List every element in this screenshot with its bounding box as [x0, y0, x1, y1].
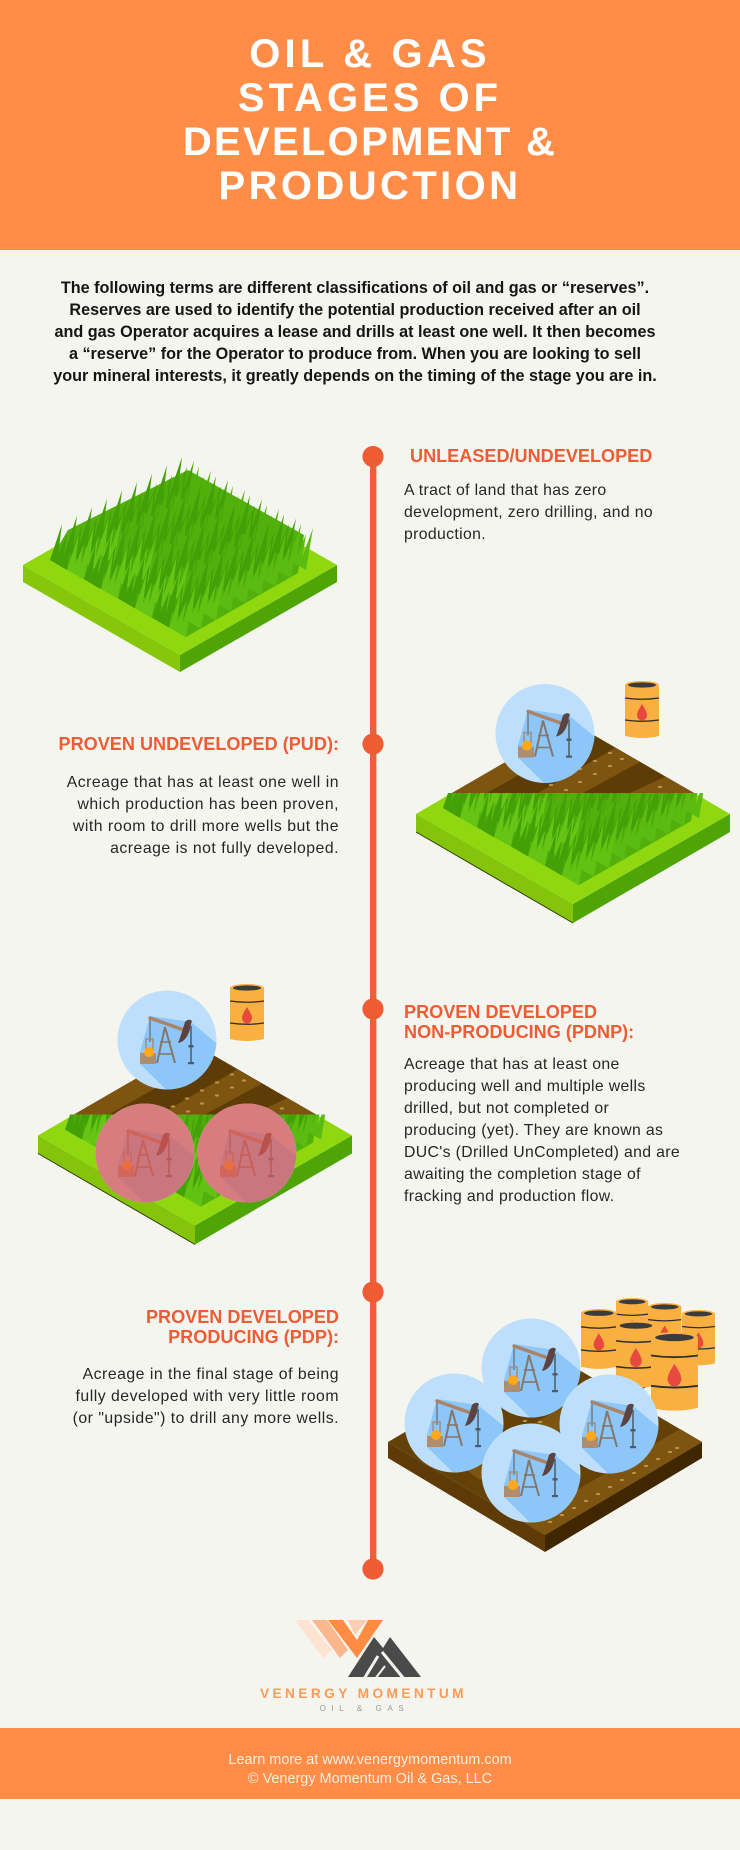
- logo tagline: OIL & GAS: [320, 1704, 409, 1713]
- intro text: The following terms are different classifications of oil and gas or “reserves”.: [61, 279, 649, 297]
- illustration: PUD tile with one well and barrel: [416, 681, 730, 923]
- timeline marker: unleased: [362, 446, 384, 467]
- panel: unleased text: [404, 446, 653, 543]
- description: Acreage that has at least one well in: [67, 774, 339, 790]
- description: with room to drill more wells but the: [73, 818, 339, 834]
- footer text: © Venergy Momentum Oil & Gas, LLC: [248, 1770, 492, 1786]
- description: Acreage that has at least one: [404, 1056, 620, 1073]
- title: [183, 32, 557, 208]
- panel: PDNP text: [404, 1002, 680, 1205]
- panel: PDP text: [73, 1307, 339, 1427]
- intro text: Reserves are used to identify the potential production received after an oil: [69, 301, 641, 319]
- description: [404, 1056, 680, 1205]
- intro text: a “reserve” for the Operator to produce from. When you are looking to sell: [69, 345, 641, 363]
- description: A tract of land that has zero: [404, 482, 606, 499]
- icon: uncompleted well left: [96, 1104, 215, 1223]
- description: fracking and production flow.: [404, 1188, 614, 1205]
- description: [404, 482, 653, 543]
- title: PRODUCTION: [219, 164, 521, 208]
- icon: pump jack: [118, 990, 237, 1110]
- title: DEVELOPMENT &: [183, 120, 557, 164]
- icon: barrel: [230, 984, 264, 1041]
- heading: PROVEN DEVELOPED: [404, 1002, 597, 1022]
- icon: pump jack left: [404, 1374, 524, 1493]
- icon: uncompleted well right: [198, 1104, 317, 1223]
- intro text: your mineral interests, it greatly depends on the timing of the stage you are in.: [53, 367, 657, 385]
- icon: barrels: [581, 1298, 715, 1411]
- header band: [0, 0, 740, 250]
- logo: [260, 1620, 467, 1713]
- heading: [404, 1002, 634, 1042]
- description: development, zero drilling, and no: [404, 504, 653, 521]
- description: which production has been proven,: [77, 796, 339, 812]
- description: fully developed with very little room: [76, 1388, 339, 1405]
- logo wordmark: VENERGY MOMENTUM: [260, 1686, 467, 1701]
- icon: barrel: [625, 681, 659, 738]
- title: OIL & GAS: [249, 32, 491, 76]
- description: producing (yet). They are known as: [404, 1122, 663, 1139]
- footer band: [0, 1728, 740, 1799]
- heading: PROVEN UNDEVELOPED (PUD):: [59, 734, 339, 754]
- title: STAGES OF: [238, 76, 502, 120]
- illustration: PDNP tile with producing and uncompleted wells: [38, 984, 352, 1244]
- heading: NON-PRODUCING (PDNP):: [404, 1022, 634, 1042]
- footer text: [228, 1752, 512, 1786]
- illustration: PDP soil tile with four wells and barrels: [388, 1298, 715, 1552]
- description: [66, 774, 339, 856]
- icon: pump jack rear: [482, 1318, 601, 1438]
- timeline: [362, 446, 384, 1580]
- footer text: Learn more at www.venergymomentum.com: [228, 1752, 512, 1768]
- icon: pump jack right: [560, 1374, 679, 1494]
- icon: pump jack front: [482, 1424, 601, 1543]
- description: acreage is not fully developed.: [110, 840, 339, 856]
- description: Acreage in the final stage of being: [83, 1366, 339, 1383]
- heading: UNLEASED/UNDEVELOPED: [410, 446, 652, 466]
- intro text: [53, 279, 657, 385]
- panel: PUD text: [59, 734, 339, 856]
- description: awaiting the completion stage of: [404, 1166, 641, 1183]
- intro text: and gas Operator acquires a lease and drills at least one well. It then becomes: [55, 323, 655, 341]
- description: drilled, but not completed or: [404, 1100, 609, 1117]
- description: DUC's (Drilled UnCompleted) and are: [404, 1144, 680, 1161]
- heading: PROVEN DEVELOPED: [146, 1307, 339, 1327]
- icon: pump jack: [496, 684, 615, 804]
- description: (or "upside") to drill any more wells.: [73, 1410, 339, 1427]
- heading: [146, 1307, 339, 1347]
- timeline marker: PUD: [362, 733, 384, 755]
- description: production.: [404, 526, 486, 543]
- timeline marker: PDP: [362, 1281, 384, 1303]
- timeline marker: PDNP: [362, 998, 384, 1020]
- illustration: grass tile: [23, 457, 337, 672]
- timeline marker: end: [362, 1558, 384, 1580]
- description: [73, 1366, 339, 1427]
- heading: PRODUCING (PDP):: [168, 1327, 339, 1347]
- description: producing well and multiple wells: [404, 1078, 646, 1095]
